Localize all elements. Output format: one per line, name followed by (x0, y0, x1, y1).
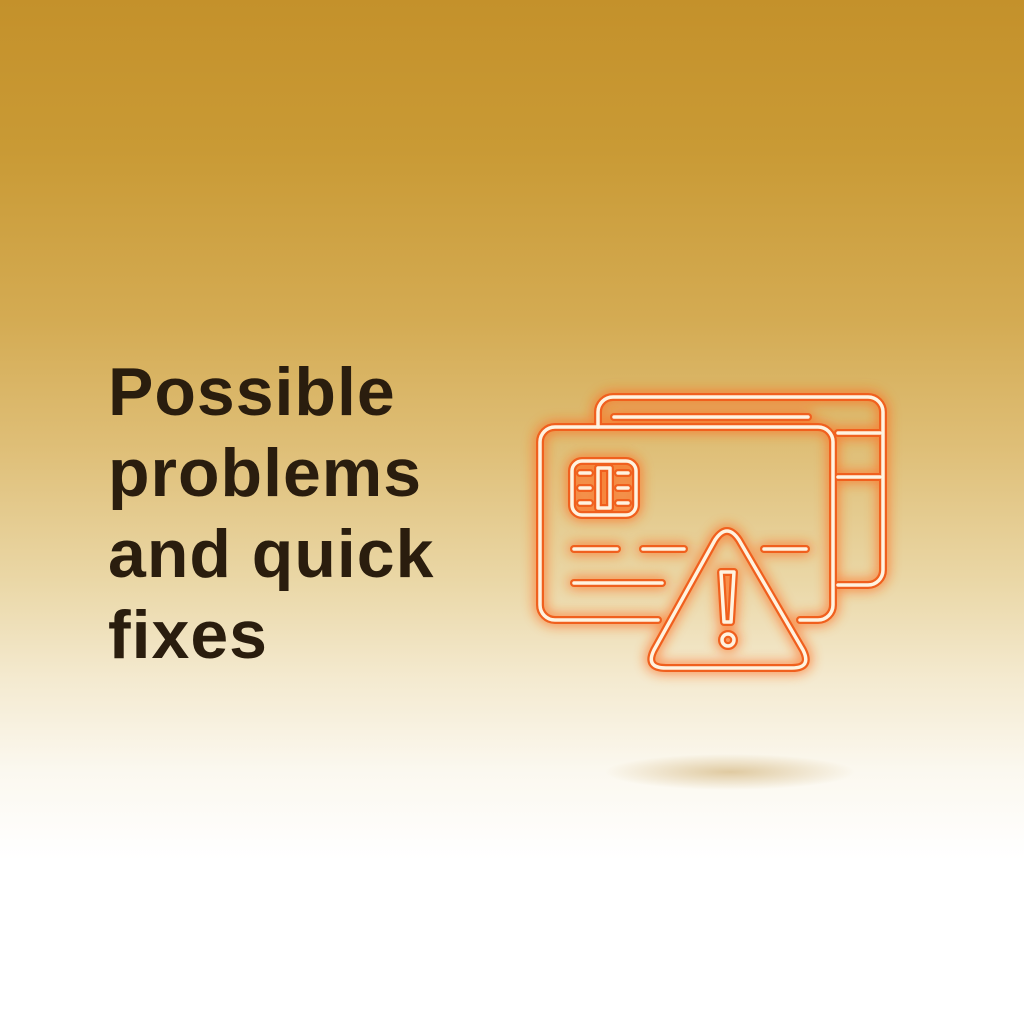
shadow (605, 754, 855, 790)
title: problems (108, 435, 422, 511)
title: fixes (108, 597, 268, 673)
title: and quick (108, 516, 434, 592)
title (108, 354, 434, 673)
title: Possible (108, 354, 396, 430)
